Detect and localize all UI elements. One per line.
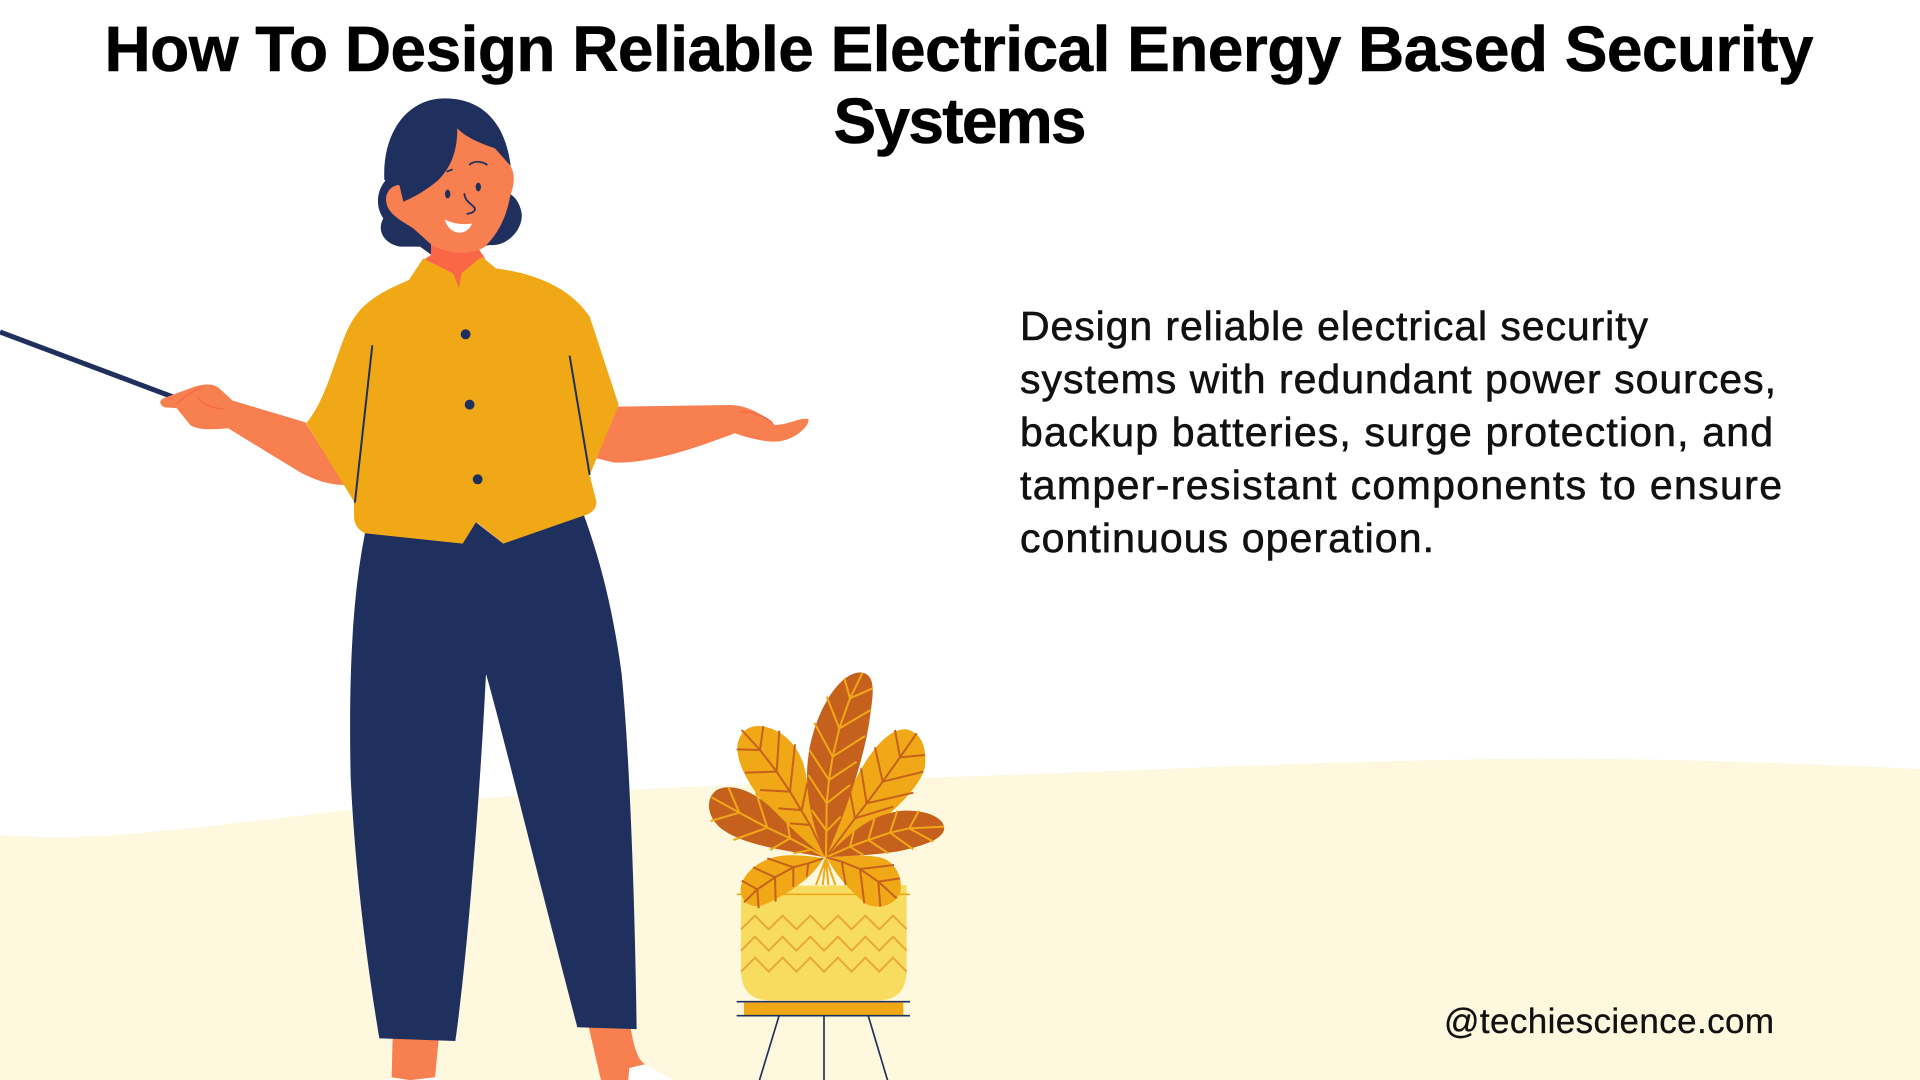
lower body: [350, 516, 674, 1080]
description text: systems with redundant power sources,: [1020, 356, 1776, 402]
plant stems: [816, 858, 835, 885]
title: Systems: [834, 85, 1086, 157]
leaf: gold left: [737, 726, 826, 857]
facial features: [445, 190, 450, 198]
top hair: [384, 98, 511, 202]
left arm with hand: [160, 384, 345, 485]
white shoes: [385, 1064, 674, 1080]
description text: [1020, 303, 1782, 561]
neck: [423, 243, 485, 288]
title: [104, 13, 1814, 157]
shirt buttons: [461, 329, 471, 339]
leaf: gold right: [826, 729, 925, 857]
leaf: brown right: [826, 811, 944, 857]
leaf: brown centre: [807, 672, 873, 857]
shirt: [306, 257, 619, 544]
title: How To Design Reliable Electrical Energy Based Security: [104, 13, 1814, 85]
leaf: brown left: [709, 787, 826, 857]
shirt fold lines: [355, 345, 590, 503]
right arm with hand: [596, 405, 809, 463]
legs and feet: [392, 1025, 645, 1080]
leaf: gold bottom right: [827, 856, 901, 907]
back hair buns: [378, 157, 522, 255]
face: [386, 123, 514, 253]
pointer stick: [0, 332, 181, 400]
pot: [737, 885, 910, 1001]
upper body: [160, 257, 809, 544]
stool: [737, 1002, 910, 1080]
description text: continuous operation.: [1020, 515, 1434, 561]
trousers: [350, 516, 637, 1041]
illustration: potted plant on stool: [709, 672, 944, 1080]
description text: tamper-resistant components to ensure: [1020, 462, 1782, 508]
leaf: gold bottom left: [741, 855, 823, 908]
description text: Design reliable electrical security: [1020, 303, 1648, 349]
illustration: woman pointing with a stick: [0, 98, 809, 1080]
description text: backup batteries, surge protection, and: [1020, 409, 1773, 455]
cream ground wave: [0, 759, 1920, 1080]
head: [378, 98, 522, 288]
website handle: @techiescience.com: [1444, 1002, 1774, 1041]
